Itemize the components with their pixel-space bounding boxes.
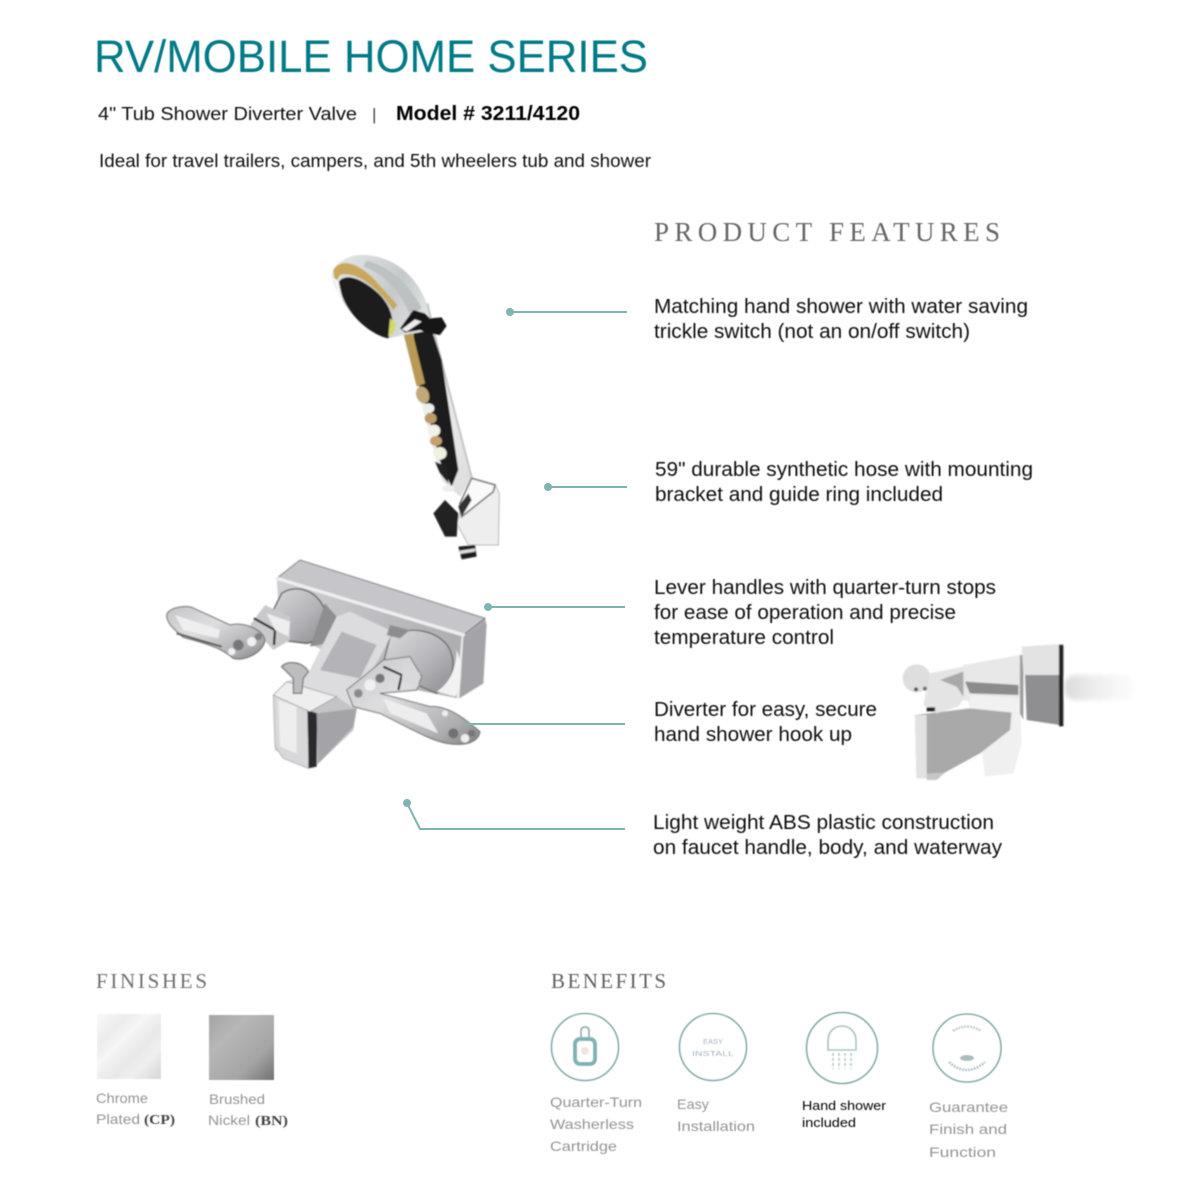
feature text: lever handles	[654, 577, 996, 649]
subtitle: product and model: 4" Tub Shower Diverter Valve	[98, 104, 357, 124]
feature text: lever handles: Lever handles with quarter-turn stops	[654, 577, 996, 599]
label: brushed nickel: Brushed	[209, 1091, 265, 1107]
label: chrome plated: Plated	[96, 1111, 140, 1127]
feature text: hand shower: trickle switch (not an on/off switch)	[654, 321, 970, 343]
feature text: hand shower: Matching hand shower with water saving	[654, 296, 1028, 318]
hand shower head and handle	[332, 255, 472, 497]
tagline: Ideal for travel trailers, campers, and 5th wheelers tub and shower	[99, 151, 651, 171]
label: quarter-turn cartridge	[550, 1094, 642, 1154]
panel: benefits	[550, 969, 1008, 1160]
label: chrome plated	[96, 1090, 175, 1128]
icon: guarantee	[933, 1014, 1001, 1082]
feature text: hose	[655, 459, 1033, 506]
feature text: ABS plastic: on faucet handle, body, and waterway	[653, 837, 1002, 859]
leader lines	[403, 308, 627, 829]
label: hand shower included	[802, 1098, 887, 1130]
feature text: ABS plastic	[653, 812, 1002, 859]
left lever handle	[167, 607, 265, 659]
subtitle: product and model: Model # 3211/4120	[396, 103, 580, 125]
right lever handle	[347, 657, 480, 744]
back plate	[277, 560, 487, 698]
feature text: lever handles: for ease of operation and precise	[654, 602, 956, 624]
label: quarter-turn cartridge: Washerless	[550, 1116, 634, 1132]
swatch: chrome	[97, 1014, 161, 1079]
spout body	[287, 612, 393, 710]
right escutcheon	[383, 630, 453, 693]
feature text: diverter: hand shower hook up	[654, 724, 852, 746]
label: chrome plated: (CP)	[144, 1113, 175, 1128]
label: brushed nickel: (BN)	[255, 1114, 288, 1129]
icon: easy install: INSTALL	[692, 1051, 734, 1058]
label: quarter-turn cartridge: Quarter-Turn	[550, 1094, 642, 1110]
icon: easy install	[680, 1014, 746, 1080]
leader: hand shower	[506, 308, 627, 316]
label: easy installation: Installation	[677, 1118, 755, 1134]
label: hand shower included: included	[802, 1115, 856, 1130]
side view body	[967, 697, 1022, 777]
heading: benefits: BENEFITS	[551, 969, 666, 993]
leader: hose	[544, 483, 627, 491]
icon: cartridge	[552, 1014, 618, 1080]
icon: hand shower	[806, 1012, 878, 1084]
mounting bracket	[457, 478, 499, 545]
feature text: hose: bracket and guide ring included	[655, 484, 943, 506]
leader: diverter	[466, 723, 625, 725]
label: guarantee: Function	[929, 1144, 996, 1160]
image: faucet side view	[903, 644, 1133, 780]
label: brushed nickel	[208, 1091, 288, 1129]
label: brushed nickel: Nickel	[208, 1112, 250, 1128]
water stream	[1065, 675, 1133, 700]
trickle switch	[400, 310, 447, 335]
subtitle: product and model: |	[372, 105, 376, 124]
heading: finishes: FINISHES	[96, 969, 207, 993]
heading: product features: PRODUCT FEATURES	[654, 217, 1000, 247]
feature text: hose: 59" durable synthetic hose with mounting	[655, 459, 1033, 481]
icon: easy install: EASY	[703, 1039, 723, 1046]
label: quarter-turn cartridge: Cartridge	[550, 1138, 617, 1154]
feature text: diverter	[654, 699, 877, 746]
swatch: brushed nickel	[209, 1015, 274, 1080]
subtitle: product and model	[98, 103, 580, 125]
panel: finishes	[96, 969, 288, 1129]
label: guarantee: Guarantee	[929, 1099, 1008, 1115]
diverter knob	[282, 663, 308, 693]
leader: lever handles	[484, 603, 625, 611]
title: RV/MOBILE HOME SERIES	[94, 31, 648, 82]
label: hand shower included: Hand shower	[802, 1098, 887, 1113]
label: guarantee: Finish and	[929, 1121, 1007, 1137]
feature text: diverter: Diverter for easy, secure	[654, 699, 877, 721]
label: guarantee	[929, 1099, 1008, 1160]
label: easy installation	[677, 1096, 755, 1134]
feature text: lever handles: temperature control	[654, 627, 834, 649]
left escutcheon	[263, 589, 327, 643]
label: chrome plated: Chrome	[96, 1090, 148, 1106]
feature text: hand shower	[654, 296, 1028, 343]
leader: ABS plastic	[403, 799, 625, 829]
image: diverter faucet	[167, 560, 487, 768]
image: hand shower	[332, 255, 499, 559]
feature text: ABS plastic: Light weight ABS plastic construction	[653, 812, 994, 834]
label: easy installation: Easy	[677, 1096, 709, 1112]
